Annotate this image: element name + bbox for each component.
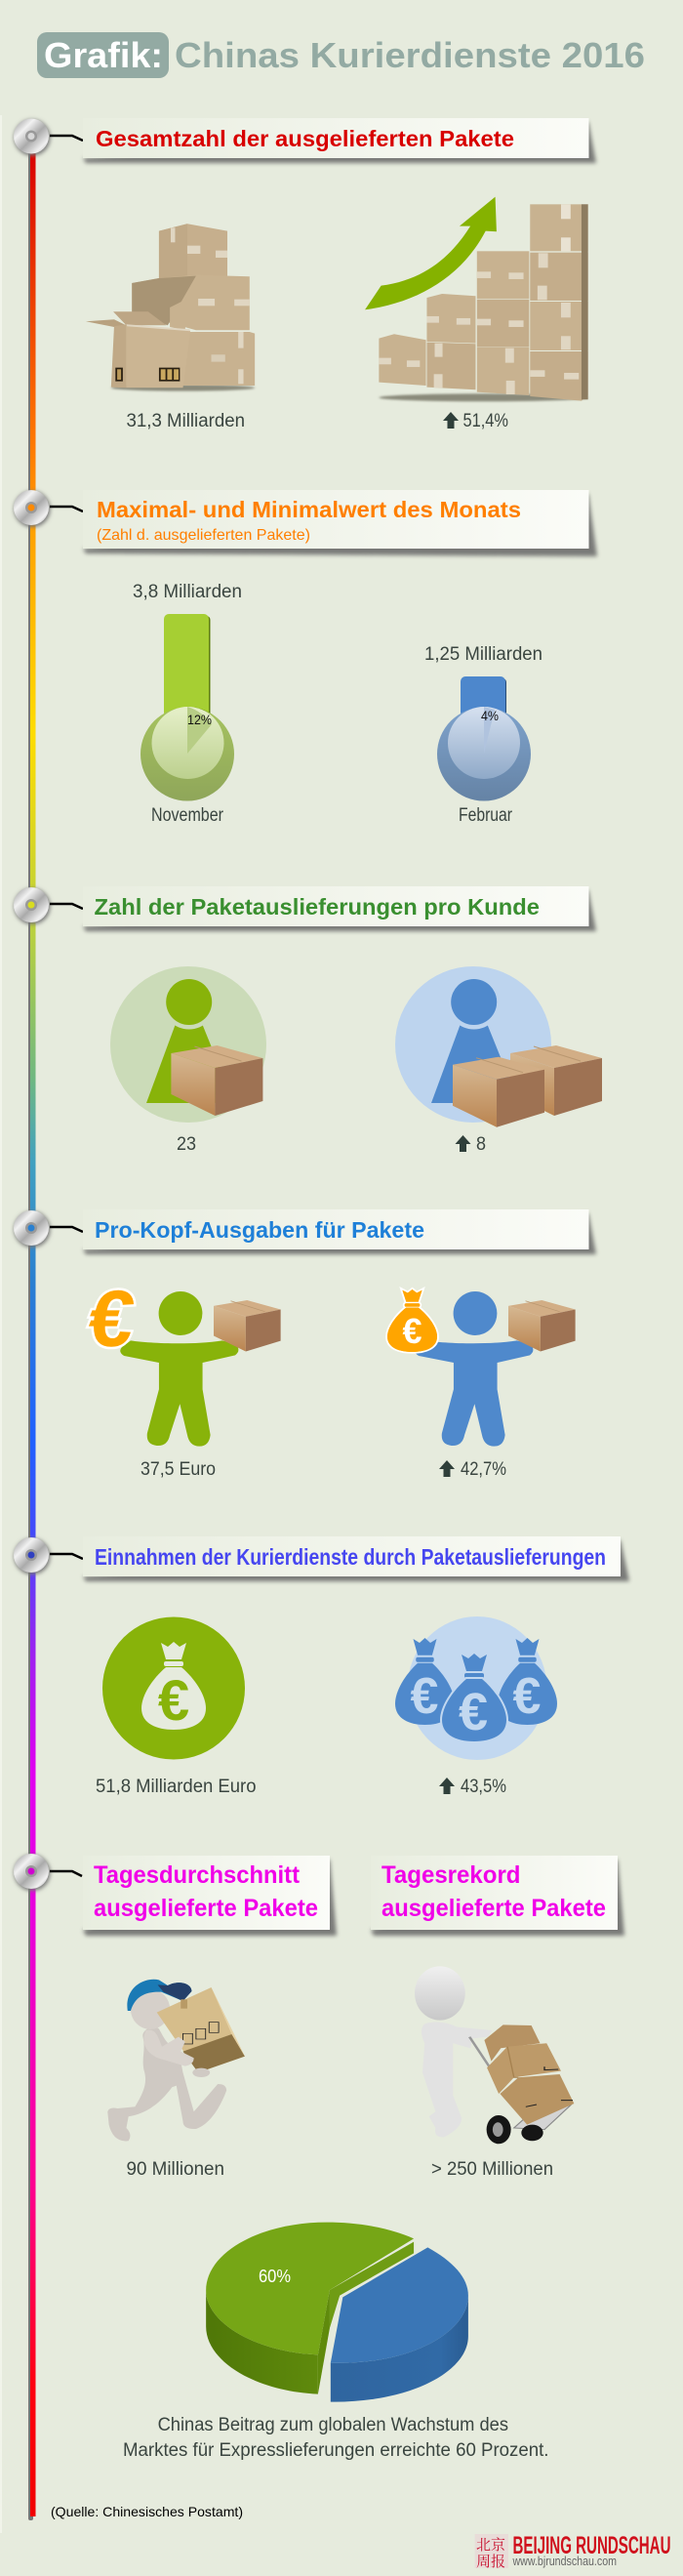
value with up arrow bbox=[439, 1777, 506, 1797]
thermometer: February bbox=[437, 676, 531, 800]
heading banner bbox=[83, 490, 597, 556]
value with up arrow bbox=[443, 411, 508, 431]
caption bbox=[123, 2415, 548, 2461]
value with up arrow bbox=[455, 1134, 486, 1155]
value: > 250 Millionen bbox=[431, 2159, 553, 2180]
timeline marker bbox=[14, 490, 83, 527]
icon: green figure with euro and parcel: € bbox=[84, 1274, 140, 1364]
timeline marker bbox=[14, 1854, 82, 1891]
heading banner: daily record bbox=[371, 1856, 624, 1936]
icon: parcel stack bbox=[86, 224, 255, 391]
icon: three money bags bbox=[395, 1616, 557, 1760]
November label: November bbox=[151, 805, 224, 826]
heading banner: daily average bbox=[83, 1856, 337, 1936]
value: 23 bbox=[177, 1134, 196, 1155]
heading banner: Pro-Kopf-Ausgaben für Pakete bbox=[95, 1217, 424, 1243]
heading banner: daily average: ausgelieferte Pakete bbox=[94, 1895, 318, 1922]
heading banner: daily record: ausgelieferte Pakete bbox=[382, 1895, 606, 1922]
logo mark: 周报 bbox=[476, 2551, 505, 2571]
value: 90 Millionen bbox=[127, 2159, 224, 2180]
value with up arrow bbox=[439, 1459, 506, 1480]
heading banner bbox=[83, 118, 596, 163]
icon: green circle with money bag bbox=[102, 1616, 245, 1759]
thermometer: November: 12% bbox=[187, 712, 212, 727]
heading banner: (Zahl d. ausgelieferten Pakete) bbox=[97, 527, 310, 544]
logo url: www.bjrundschau.com bbox=[512, 2555, 617, 2568]
value with up arrow: 8 bbox=[476, 1134, 486, 1155]
thermometer: November bbox=[141, 614, 234, 800]
icon: blue figure with money bag and parcel: € bbox=[402, 1311, 422, 1351]
heading banner: daily record: Tagesrekord bbox=[382, 1861, 521, 1889]
value: 51,8 Milliarden Euro bbox=[96, 1777, 256, 1797]
section 1: total parcels bbox=[14, 118, 596, 431]
icon: three money bags: € bbox=[459, 1683, 488, 1741]
icon: running courier with parcel bbox=[107, 1980, 245, 2141]
caption: Chinas Beitrag zum globalen Wachstum des bbox=[158, 2415, 508, 2435]
icon: green figure with euro and parcel bbox=[84, 1274, 281, 1447]
caption: Marktes für Expresslieferungen erreichte 60 Prozent. bbox=[123, 2440, 548, 2461]
heading banner bbox=[83, 886, 596, 931]
title text: Chinas Kurierdienste 2016 bbox=[175, 35, 645, 75]
timeline marker bbox=[14, 1210, 83, 1247]
icon: figure with hand truck and parcels bbox=[415, 1966, 574, 2144]
title badge: Grafik: bbox=[44, 35, 163, 75]
icon: growing stack with arrow bbox=[365, 197, 588, 401]
thermometer: February: 4% bbox=[481, 708, 499, 723]
title bbox=[37, 32, 645, 78]
icon: green circle with money bag: € bbox=[158, 1669, 189, 1733]
November value: 3,8 Milliarden bbox=[133, 582, 242, 602]
section 6: daily average and record bbox=[14, 1854, 624, 2180]
value with up arrow: 43,5% bbox=[461, 1777, 506, 1797]
section 2: monthly max and min bbox=[14, 490, 597, 826]
icon: blue figure with money bag and parcel bbox=[387, 1289, 576, 1447]
timeline line bbox=[28, 146, 35, 2520]
section 3: deliveries per customer bbox=[14, 886, 602, 1155]
logo: Beijing Rundschau bbox=[475, 2532, 671, 2571]
logo mark bbox=[475, 2534, 508, 2571]
value with up arrow: 51,4% bbox=[462, 411, 508, 431]
section 4: per-capita spending bbox=[14, 1209, 596, 1480]
heading banner: Gesamtzahl der ausgelieferten Pakete bbox=[96, 126, 514, 151]
pie label: 60% bbox=[259, 2267, 291, 2286]
logo mark: 北京 bbox=[476, 2534, 505, 2555]
icon: three money bags: € bbox=[513, 1668, 541, 1725]
heading banner: daily average: Tagesdurchschnitt bbox=[94, 1861, 301, 1889]
timeline marker bbox=[14, 887, 83, 924]
pie chart: China 60 percent bbox=[206, 2223, 468, 2402]
value with up arrow: 42,7% bbox=[461, 1459, 506, 1480]
icon: three money bags: € bbox=[411, 1668, 438, 1725]
heading banner bbox=[83, 1209, 596, 1254]
heading banner: Zahl der Paketauslieferungen pro Kunde bbox=[94, 894, 540, 920]
heading banner bbox=[83, 1536, 629, 1581]
February label: Februar bbox=[459, 805, 513, 826]
icon: customer with two parcels bbox=[395, 966, 602, 1127]
February value: 1,25 Milliarden bbox=[424, 644, 542, 665]
value: 37,5 Euro bbox=[141, 1459, 216, 1480]
section 5: revenue bbox=[14, 1536, 629, 1797]
icon: customer with one parcel bbox=[110, 966, 266, 1123]
heading banner: Maximal- und Minimalwert des Monats bbox=[97, 497, 521, 522]
source note: (Quelle: Chinesisches Postamt) bbox=[51, 2504, 243, 2519]
timeline marker bbox=[14, 119, 83, 156]
timeline marker bbox=[14, 1537, 83, 1574]
value: 31,3 Milliarden bbox=[127, 411, 245, 431]
